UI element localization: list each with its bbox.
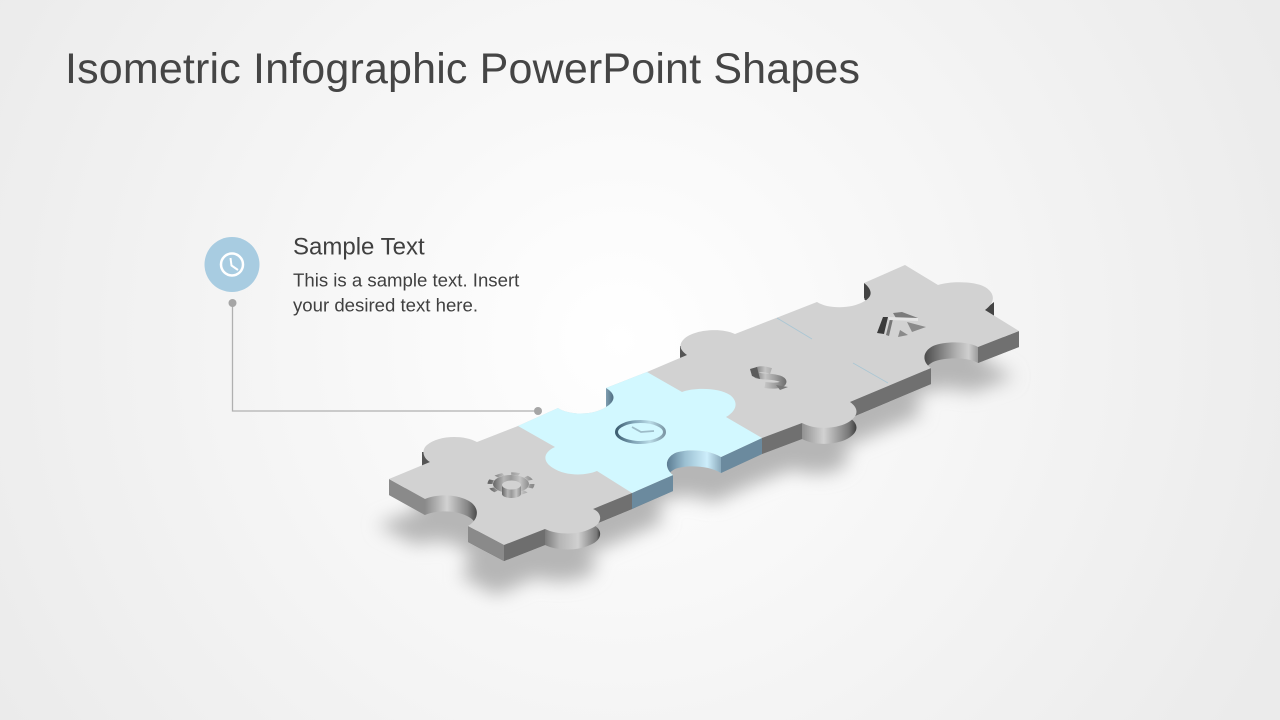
- puzzle top face: grey pieces: [389, 265, 1019, 545]
- callout body text: your desired text here.: [293, 294, 478, 316]
- isometric puzzle: [389, 265, 1019, 561]
- icon: clock cut-out: [616, 422, 664, 442]
- callout body text: This is a sample text. Insert: [293, 270, 520, 290]
- puzzle shadow: [377, 311, 1014, 595]
- seam between right-hand pieces: [777, 318, 888, 383]
- icon: clock badge: [204, 237, 260, 292]
- icon: gear cut-out: [490, 474, 532, 498]
- connector line from icon to puzzle piece: [228, 299, 542, 415]
- puzzle side walls: [389, 281, 1019, 561]
- title: Isometric Infographic PowerPoint Shapes: [65, 45, 860, 93]
- puzzle top face: highlighted blue piece: [518, 372, 762, 493]
- icon: dollar cut-out: [750, 367, 788, 390]
- icon: blue notch wall crescent: [606, 388, 614, 407]
- icon: arrows cut-out: [877, 312, 926, 337]
- callout heading: Sample Text: [293, 234, 425, 260]
- callout: clock step: [204, 234, 542, 415]
